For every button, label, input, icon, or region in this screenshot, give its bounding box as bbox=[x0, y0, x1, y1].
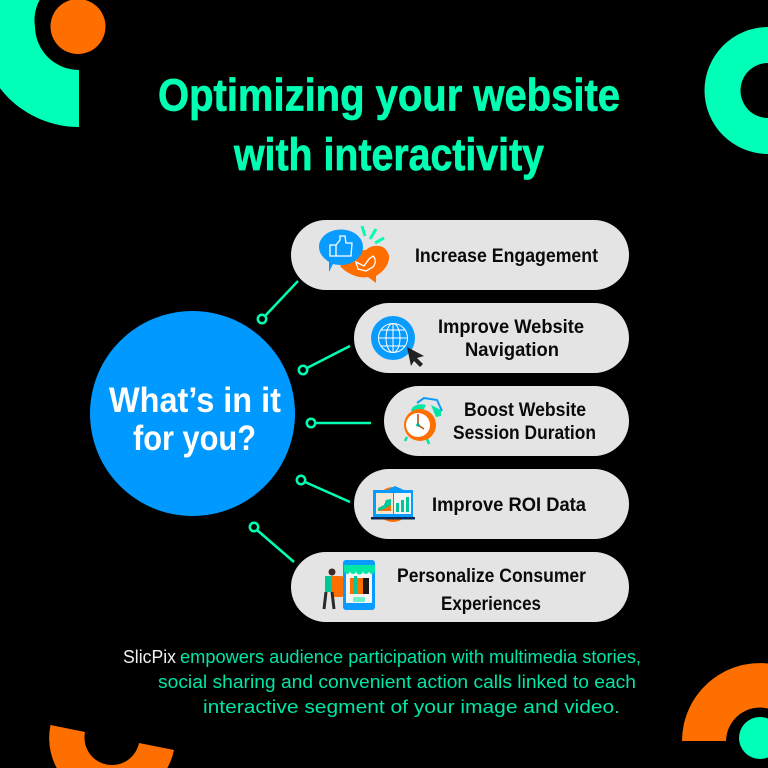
hub circle: What's in it for you?: for you? bbox=[133, 419, 256, 458]
decoration: bottom-left arc bbox=[49, 725, 174, 768]
label: Boost Website bbox=[464, 399, 586, 421]
connector 1 bbox=[258, 281, 298, 323]
label: Increase Engagement bbox=[415, 245, 598, 267]
description text: empowers audience participation with multimedia stories, bbox=[180, 647, 641, 667]
title: with interactivity bbox=[233, 129, 544, 180]
description text bbox=[123, 647, 641, 717]
description text: social sharing and convenient action calls linked to each bbox=[158, 672, 636, 692]
label: Experiences bbox=[441, 593, 541, 615]
connector 4 bbox=[297, 476, 350, 502]
icon: globe with cursor bbox=[371, 316, 424, 367]
label: Personalize Consumer bbox=[397, 565, 586, 587]
title: Optimizing your website bbox=[158, 70, 620, 120]
panel: Improve ROI Data bbox=[354, 469, 629, 539]
label bbox=[438, 316, 584, 361]
panel: Improve Website Navigation bbox=[354, 303, 629, 373]
description text: interactive segment of your image and video. bbox=[203, 697, 620, 717]
label bbox=[453, 399, 596, 444]
label: Improve ROI Data bbox=[432, 494, 586, 516]
label bbox=[397, 565, 586, 615]
hub circle: What's in it for you?: What’s in it bbox=[109, 381, 281, 420]
label: Navigation bbox=[465, 339, 559, 361]
panel: Increase Engagement bbox=[291, 220, 629, 290]
label: Improve Website bbox=[438, 316, 584, 338]
title bbox=[158, 70, 620, 180]
connector 5 bbox=[250, 523, 294, 562]
decoration: top-right ring bbox=[704, 27, 768, 154]
label: Session Duration bbox=[453, 422, 596, 444]
connector 2 bbox=[299, 346, 350, 374]
description text: SlicPix bbox=[123, 647, 176, 667]
panel: Personalize Consumer Experiences bbox=[291, 552, 629, 622]
icon: chat bubbles with thumb and heart bbox=[319, 226, 389, 283]
icon: laptop with charts bbox=[371, 486, 415, 522]
hub circle: What's in it for you? bbox=[90, 311, 295, 516]
icon: shop on phone with shopper bbox=[324, 560, 375, 610]
decoration: bottom-right shapes bbox=[682, 663, 768, 759]
icon: alarm clock bbox=[404, 398, 442, 444]
panel: Boost Website Session Duration bbox=[384, 386, 629, 456]
decoration: top-left shapes bbox=[0, 0, 106, 127]
connector 3 bbox=[307, 419, 371, 427]
